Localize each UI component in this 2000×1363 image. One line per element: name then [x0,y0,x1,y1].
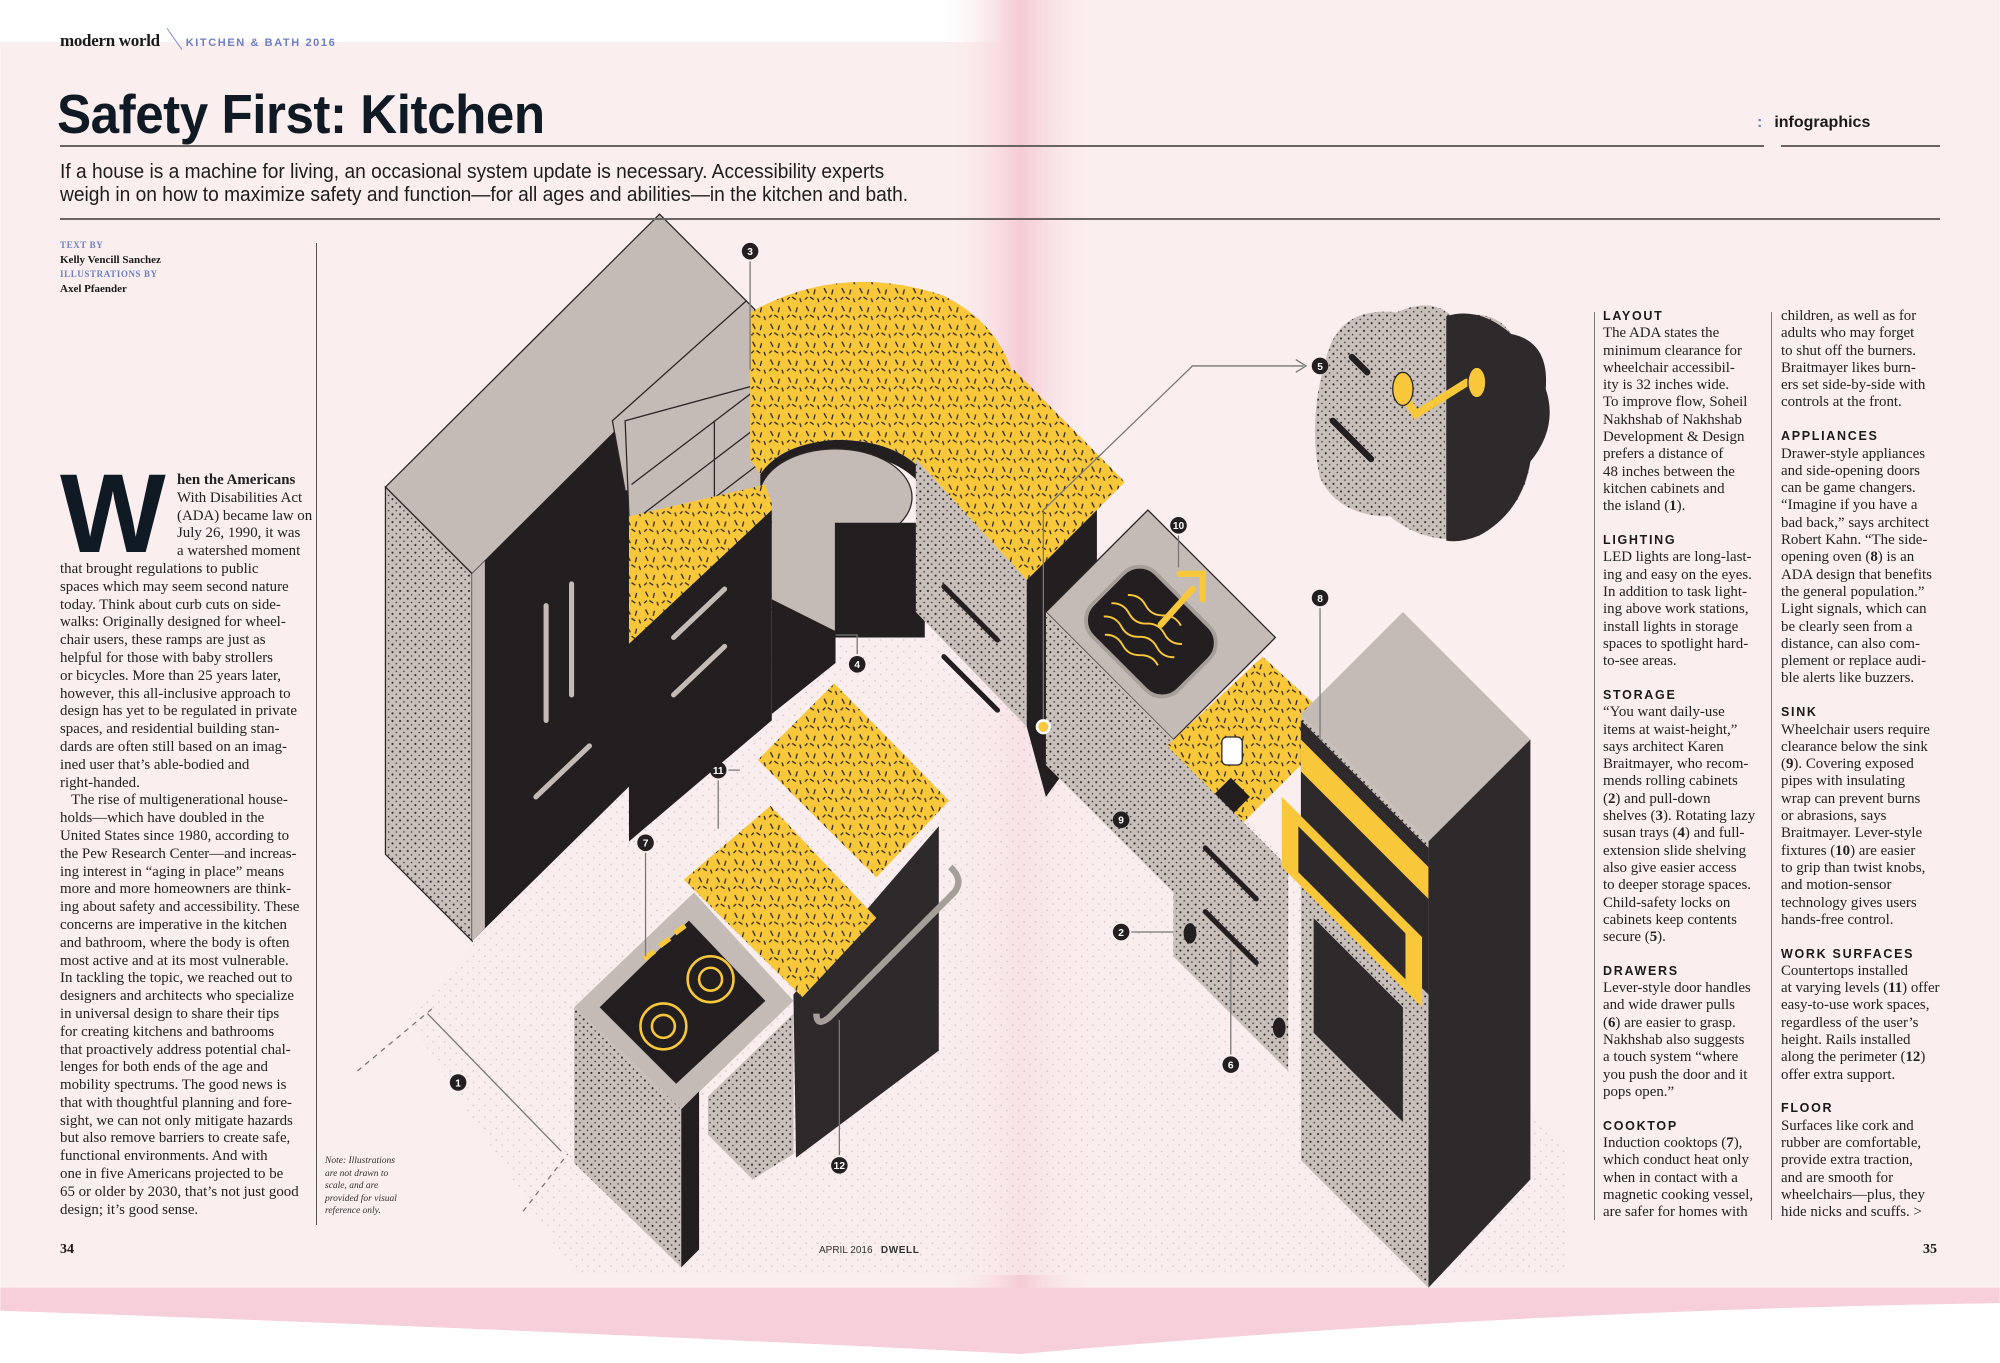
sidebar column 1: ing above work stations, [1603,601,1749,617]
sidebar column 2: ers set side-by-side with [1781,377,1925,393]
note: provided for visual [325,1194,397,1204]
number markers: 1 [455,1078,461,1089]
sidebar column 2: children, as well as for [1781,308,1916,324]
sidebar column 2: adults who may forget [1781,325,1914,341]
sidebar column 1: Lever-style door handles [1603,980,1751,996]
sidebar column 1: extension slide shelving [1603,843,1746,859]
sidebar column 1: kitchen cabinets and [1603,481,1725,497]
sidebar column 2: the general population.” [1781,584,1924,600]
main article text: hen the Americans [177,472,295,488]
main article text: design has yet to be regulated in private [60,703,297,719]
sidebar column 2: controls at the front. [1781,394,1902,410]
byline: TEXT BY [60,240,103,250]
floor [408,612,1569,1275]
sidebar column 2: wheelchairs—plus, they [1781,1187,1925,1203]
sidebar column 2: distance, can also com- [1781,636,1920,652]
sidebar column 1: items at waist-height,” [1603,722,1737,738]
tall fridge unit [385,214,746,941]
sidebar column 1: ing and easy on the eyes. [1603,567,1752,583]
sidebar column 2: opening oven (8) is an [1781,549,1914,565]
main article text: (ADA) became law on [177,508,312,524]
sidebar column 1: STORAGE [1603,688,1676,702]
sidebar column 2: at varying levels (11) offer [1781,980,1940,996]
left lower cabinet counter [629,485,836,842]
main article text: and bathroom, where the body is often [60,935,290,951]
byline: Axel Pfaender [60,282,127,294]
sidebar column 1: a touch system “where [1603,1049,1738,1065]
sidebar column 2: and are smooth for [1781,1170,1893,1186]
main article text: ing about safety and accessibility. These [60,899,299,915]
sidebar column 1 [1603,309,1756,1220]
subtitle [60,160,908,206]
note: reference only. [325,1206,381,1216]
counter by oven [1167,657,1339,1071]
sidebar column 1: shelves (3). Rotating lazy [1603,808,1755,824]
byline: Kelly Vencill Sanchez [60,254,161,266]
main article text: one in five Americans projected to be [60,1166,283,1182]
sidebar column 2: wrap can prevent burns [1781,791,1920,807]
sidebar column 1: To improve flow, Soheil [1603,394,1747,410]
sidebar column 2: regardless of the user’s [1781,1015,1918,1031]
sidebar column 1: pops open.” [1603,1084,1674,1100]
number markers: 6 [1228,1060,1234,1071]
sidebar column 1: are safer for homes with [1603,1204,1748,1220]
sidebar column 2: offer extra support. [1781,1067,1895,1083]
main article text: The rise of multigenerational house- [71,792,288,808]
sidebar column 2: bad back,” says architect [1781,515,1929,531]
sidebar column 1: 48 inches between the [1603,464,1735,480]
sidebar column 1: mends rolling cabinets [1603,773,1738,789]
number markers: 8 [1317,594,1323,605]
sidebar column 1: Induction cooktops (7), [1603,1135,1742,1151]
main article text: for creating kitchens and bathrooms [60,1024,274,1040]
main article text: today. Think about curb cuts on side- [60,597,281,613]
oven tower (8) [1282,612,1530,1288]
sidebar column 1: Nakhshab of Nakhshab [1603,412,1742,428]
sidebar column 1: “You want daily-use [1603,704,1725,720]
sidebar column 1: ity is 32 inches wide. [1603,377,1729,393]
sidebar column 1: LIGHTING [1603,533,1676,547]
sidebar column 1: you push the door and it [1603,1067,1747,1083]
sidebar column 2: hide nicks and scuffs. > [1781,1204,1922,1220]
number markers: 2 [1118,928,1124,939]
sidebar column 1: DRAWERS [1603,964,1679,978]
sidebar column 1: In addition to task light- [1603,584,1747,600]
sidebar column 1: which conduct heat only [1603,1152,1749,1168]
sidebar column 2: Drawer-style appliances [1781,446,1925,462]
sidebar column 1: minimum clearance for [1603,343,1742,359]
main article text: concerns are imperative in the kitchen [60,917,287,933]
note: scale, and are [325,1181,378,1191]
main article text: lenges for both ends of the age and [60,1059,268,1075]
sidebar column 2: or abrasions, says [1781,808,1886,824]
main article text: dards are often still based on an imag- [60,739,287,755]
sidebar column 1: (2) and pull-down [1603,791,1711,807]
note: are not drawn to [325,1168,388,1178]
main article text: mobility spectrums. The good news is [60,1077,286,1093]
main article text: 65 or older by 2030, that’s not just good [60,1184,299,1200]
main article text: W [60,451,166,576]
subtitle: If a house is a machine for living, an occasional system update is necessary. Accessibility experts [60,160,884,183]
main article text: a watershed moment [177,543,300,559]
main article text: sight, we can not only mitigate hazards [60,1113,293,1129]
sidebar column 1: susan trays (4) and full- [1603,825,1744,841]
sidebar column 2: be clearly seen from a [1781,619,1912,635]
main article text: spaces, and residential building stan- [60,721,280,737]
header: section label: modern world KITCHEN & BATH 2016 [60,31,336,50]
main article text: or bicycles. More than 25 years later, [60,668,281,684]
sidebar column 1: COOKTOP [1603,1119,1678,1133]
shelving unit (3) [612,301,772,580]
sidebar column 1: Development & Design [1603,429,1744,445]
number markers: 10 [1173,521,1184,532]
yellow arc counter [750,282,1014,491]
main article text: designers and architects who specialize [60,988,294,1004]
main article text: that proactively address potential chal- [60,1042,291,1058]
sidebar column 1: when in contact with a [1603,1170,1738,1186]
sidebar column 2: APPLIANCES [1781,429,1879,443]
main article text: holds—which have doubled in the [60,810,264,826]
sidebar column 2: (9). Covering exposed [1781,756,1914,772]
main article text: ined user that’s able-bodied and [60,757,249,773]
sidebar column 1: also give easier access [1603,860,1737,876]
sink counter (9,10) [1046,510,1275,893]
byline [60,240,161,294]
sidebar column 2: ADA design that benefits [1781,567,1932,583]
main article text: the Pew Research Center—and increas- [60,846,296,862]
sidebar column 2: provide extra traction, [1781,1152,1913,1168]
sidebar column 1: The ADA states the [1603,325,1719,341]
sidebar column 2 [1781,308,1940,1220]
main article text: that with thoughtful planning and fore- [60,1095,292,1111]
number markers: 5 [1317,362,1323,373]
callout lines [357,261,1320,1211]
sidebar column 2: Countertops installed [1781,963,1908,979]
blob inset (5) [1315,305,1550,541]
number markers [450,243,1328,1174]
main article text: most active and at its most vulnerable. [60,953,289,969]
sidebar column 1: Child-safety locks on [1603,894,1730,910]
sidebar column 1: spaces to spotlight hard- [1603,636,1748,652]
number markers: 11 [713,766,724,777]
sidebar column 2: easy-to-use work spaces, [1781,997,1929,1013]
sidebar column 2: height. Rails installed [1781,1032,1910,1048]
main article text: functional environments. And with [60,1148,268,1164]
sidebar column 1: LAYOUT [1603,309,1663,323]
sidebar column 2: FLOOR [1781,1101,1833,1115]
sidebar column 2: to shut off the burners. [1781,343,1916,359]
sidebar column 1: the island (1). [1603,498,1685,514]
note [324,1156,397,1216]
main article text: walks: Originally designed for wheel- [60,614,286,630]
lazy susan (4) [759,449,925,638]
main article text: United States since 1980, according to [60,828,289,844]
island [574,683,958,1267]
sidebar column 1: install lights in storage [1603,619,1738,635]
sidebar column 1: to deeper storage spaces. [1603,877,1751,893]
sidebar column 2: pipes with insulating [1781,773,1905,789]
note: Note: Illustrations [325,1156,395,1166]
main article text: design; it’s good sense. [60,1202,198,1218]
main article text: In tackling the topic, we reached out to [60,970,292,986]
sidebar column 2: rubber are comfortable, [1781,1135,1921,1151]
sidebar column 2: Light signals, which can [1781,601,1927,617]
infographics tag: : infographics [1757,114,1870,131]
column rules [1594,312,1595,1220]
main article text: more and more homeowners are think- [60,881,291,897]
sidebar column 2: and side-opening doors [1781,463,1920,479]
sidebar column 2: SINK [1781,705,1818,719]
main article text: ing interest in “aging in place” means [60,864,284,880]
page backgrounds [0,42,1001,1317]
main article text: right-handed. [60,775,140,791]
sidebar column 1: LED lights are long-last- [1603,549,1751,565]
main article text: but also remove barriers to create safe, [60,1130,290,1146]
sidebar column 2: WORK SURFACES [1781,947,1914,961]
right wall counter [916,370,1125,797]
sidebar column 2: ble alerts like buzzers. [1781,670,1914,686]
sidebar column 2: Surfaces like cork and [1781,1118,1914,1134]
sidebar column 2: to grip than twist knobs, [1781,860,1925,876]
number markers: 9 [1118,816,1124,827]
sidebar column 1: secure (5). [1603,929,1666,945]
number markers: 4 [854,660,860,671]
sidebar column 2: fixtures (10) are easier [1781,843,1915,859]
main article text: With Disabilities Act [177,490,302,506]
sidebar column 2: technology gives users [1781,894,1917,910]
sidebar column 1: Nakhshab also suggests [1603,1032,1744,1048]
sidebar column 2: plement or replace audi- [1781,653,1926,669]
main article text: spaces which may seem second nature [60,579,289,595]
sidebar column 2: along the perimeter (12) [1781,1049,1925,1065]
subtitle: weigh in on how to maximize safety and function—for all ages and abilities—in the kitchen and bath. [60,183,908,206]
sidebar column 1: prefers a distance of [1603,446,1723,462]
sidebar column 2: clearance below the sink [1781,739,1928,755]
main article text: chair users, these ramps are just as [60,632,266,648]
main article text: in universal design to share their tips [60,1006,279,1022]
bottom page edge [0,1288,2000,1354]
sidebar column 2: can be game changers. [1781,480,1916,496]
text: APRIL 2016 DWELL [819,1245,919,1256]
sidebar column 2: “Imagine if you have a [1781,497,1917,513]
sidebar column 2: Robert Kahn. “The side- [1781,532,1927,548]
sidebar column 1: wheelchair accessibil- [1603,360,1735,376]
main article text: helpful for those with baby strollers [60,650,273,666]
sidebar column 2: hands-free control. [1781,912,1893,928]
sidebar column 2: Wheelchair users require [1781,722,1930,738]
sidebar column 1: cabinets keep contents [1603,912,1737,928]
number markers: 12 [834,1161,845,1172]
sidebar column 1: (6) are easier to grasp. [1603,1015,1736,1031]
main article text: that brought regulations to public [60,561,259,577]
byline: ILLUSTRATIONS BY [60,269,158,279]
title: Safety First: Kitchen [57,83,545,145]
sidebar column 1: Braitmayer, who recom- [1603,756,1748,772]
sidebar column 1: says architect Karen [1603,739,1724,755]
sidebar column 2: Braitmayer. Lever-style [1781,825,1922,841]
sidebar column 2: and motion-sensor [1781,877,1891,893]
sidebar column 2: Braitmayer likes burn- [1781,360,1916,376]
sidebar column 1: to-see areas. [1603,653,1677,669]
main article text: however, this all-inclusive approach to [60,686,291,702]
number markers: 3 [747,247,753,258]
folio right: 35 [1923,1242,1937,1257]
folio left: 34 [60,1242,74,1257]
sidebar column 1: magnetic cooking vessel, [1603,1187,1753,1203]
sidebar column 1: and wide drawer pulls [1603,997,1735,1013]
number markers: 7 [643,839,649,850]
main article text: July 26, 1990, it was [177,525,300,541]
main article text [60,451,312,1218]
